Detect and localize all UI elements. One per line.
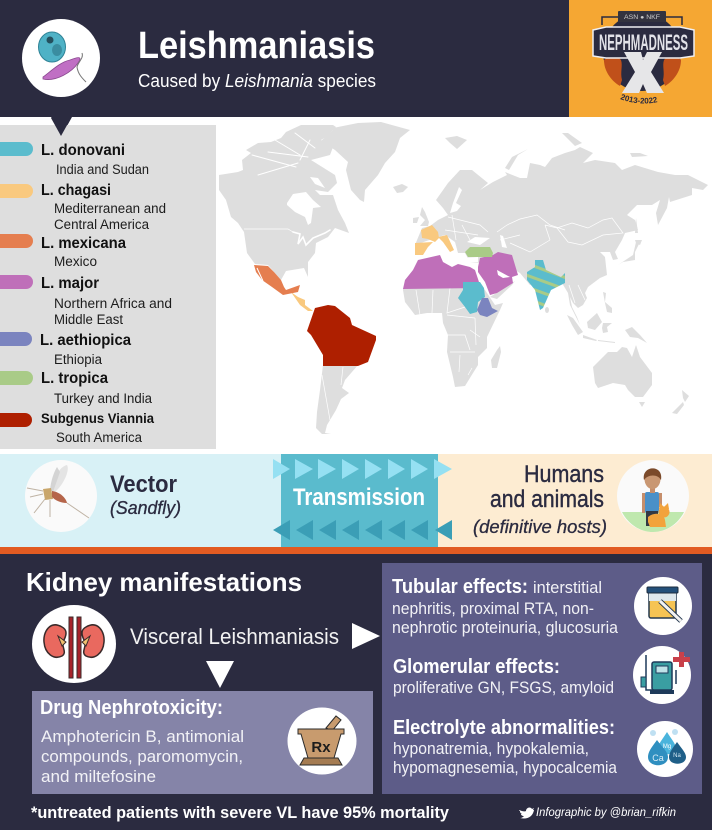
icon: human and cat: [617, 460, 689, 532]
L. chagasi entry: Mediterranean and: [54, 201, 166, 216]
logo panel: NephMadness X: ASN ● NKF: [624, 15, 660, 21]
borders: africa: [416, 288, 480, 375]
panel: drug nephrotoxicity: [32, 691, 373, 794]
region: Ethiopia (L. aethiopica): [477, 298, 498, 317]
great lakes: [293, 230, 330, 245]
iceland: [393, 184, 408, 193]
L. major entry: [0, 275, 172, 327]
band: transmission: [0, 454, 712, 554]
Subgenus Viannia entry: [0, 410, 154, 445]
borders: europe and central asia: [445, 215, 565, 252]
logo years: [620, 99, 668, 104]
L. major entry: Northern Africa and: [54, 296, 172, 311]
arrows: rightward: [273, 459, 452, 479]
text: humans and animals: [473, 461, 607, 537]
icon: mortar and pestle: Rx: [311, 739, 331, 756]
arctic channels: [252, 133, 315, 175]
region: Mexico (L. mexicana): [254, 265, 300, 295]
glomerular effects: [393, 656, 614, 697]
icon: kidneys: [32, 605, 116, 683]
title: Leishmaniasis: [138, 25, 375, 67]
L. donovani entry: L. donovani: [41, 142, 125, 159]
L. mexicana entry: [0, 234, 126, 269]
icon: electrolyte drops: K: [666, 762, 670, 768]
electrolyte abnormalities: [393, 717, 618, 777]
L. chagasi entry: Central America: [54, 217, 149, 232]
panel: drug nephrotoxicity: and miltefosine: [41, 768, 156, 786]
novaya zemlya: [505, 149, 528, 170]
text: vector: [110, 471, 181, 518]
region: Mediterranean (L. chagasi): [291, 225, 454, 311]
panel: drug nephrotoxicity: Drug Nephrotoxicity:: [40, 697, 223, 719]
panel: drug nephrotoxicity: compounds, paromomycin,: [41, 748, 243, 766]
greenland: [321, 122, 410, 202]
borders: americas: [244, 229, 343, 420]
icon: parasite with pointer: [22, 19, 100, 136]
region: India (striped): [527, 260, 565, 310]
icon: mortar and pestle: [288, 708, 356, 774]
L. tropica entry: Turkey and India: [54, 391, 152, 406]
text: humans and animals: (definitive hosts): [473, 517, 607, 537]
borders: east asia: [545, 218, 623, 303]
text: humans and animals: and animals: [490, 486, 604, 513]
L. chagasi entry: L. chagasi: [41, 182, 111, 199]
L. mexicana entry: L. mexicana: [41, 235, 126, 252]
L. aethiopica entry: L. aethiopica: [40, 332, 131, 349]
L. tropica entry: L. tropica: [41, 370, 108, 387]
world map: [219, 122, 708, 434]
region: South America (Subgenus Viannia): [307, 305, 376, 366]
yemen: [490, 281, 515, 299]
region: Turkey (L. tropica): [465, 247, 493, 257]
tubular effects: interstitial: [533, 579, 602, 597]
arrows: leftward: [273, 520, 452, 540]
text: vector: (Sandfly): [110, 498, 181, 518]
arrow: down: [206, 661, 234, 688]
L. aethiopica entry: [0, 332, 131, 367]
L. major entry: L. major: [41, 275, 99, 292]
icon: electrolyte drops: Mg: [663, 744, 671, 750]
label: Transmission: Transmission: [293, 484, 425, 511]
uk and ireland: [413, 207, 429, 226]
eurasia: [415, 147, 708, 325]
label: visceral leishmaniasis: Visceral Leishmaniasis: [130, 624, 339, 649]
panel: kidney manifestations: [0, 554, 712, 830]
credit with twitter icon: Infographic by @brian_rifkin: [536, 805, 676, 819]
text: vector: Vector: [110, 471, 177, 498]
south america south: [316, 365, 358, 434]
footnote: *untreated patients with severe VL have 95% mortality: [31, 803, 450, 822]
electrolyte abnormalities: Electrolyte abnormalities:: [393, 717, 615, 739]
australia and nz: [593, 345, 689, 414]
tubular effects: [392, 576, 619, 637]
tubular effects: nephritis, proximal RTA, non-: [392, 600, 594, 618]
land masses in page coordinates: [219, 122, 708, 434]
L. chagasi entry: [0, 182, 166, 232]
icon: electrolyte drops: [637, 721, 693, 777]
icon: urine cup: [634, 577, 692, 635]
electrolyte abnormalities: hypomagnesemia, hypocalcemia: [393, 759, 618, 777]
region: N. Africa and Middle East (L. major): [403, 252, 518, 295]
icon: electrolyte drops: Ca: [652, 753, 664, 763]
text: humans and animals: Humans: [524, 461, 604, 488]
logo panel: NephMadness X: 2013-2022: [620, 94, 658, 104]
icon: dialysis machine: [633, 646, 691, 704]
icon: sandfly: [25, 460, 97, 532]
L. donovani entry: [0, 142, 149, 177]
arrow: right: [352, 623, 380, 649]
svalbard: [445, 136, 467, 149]
subtitle: Caused by Leishmania species: [138, 71, 376, 91]
north america: [219, 125, 349, 280]
glomerular effects: Glomerular effects:: [393, 656, 560, 678]
panel: drug nephrotoxicity: Amphotericin B, antimonial: [41, 728, 244, 746]
panel: species legend: [0, 118, 216, 449]
electrolyte abnormalities: hyponatremia, hypokalemia,: [393, 740, 589, 758]
heading: Kidney manifestations: [26, 567, 302, 597]
Subgenus Viannia entry: Subgenus Viannia: [41, 410, 154, 426]
white water features: [287, 177, 507, 262]
logo panel: NephMadness X: [569, 0, 712, 117]
L. mexicana entry: Mexico: [54, 254, 97, 269]
japan and sakhalin: [618, 218, 642, 265]
region: Sudan (L. donovani): [458, 282, 485, 314]
africa: [403, 286, 503, 387]
L. major entry: Middle East: [54, 312, 123, 327]
header banner: [0, 0, 712, 117]
arctic russia islands: [562, 133, 648, 157]
L. tropica entry: [0, 370, 152, 406]
sri lanka: [545, 307, 549, 313]
L. aethiopica entry: Ethiopia: [54, 352, 102, 367]
tubular effects: Tubular effects:: [392, 576, 528, 598]
tubular effects: nephrotic proteinuria, glucosuria: [392, 619, 619, 637]
icon: electrolyte drops: Na: [673, 753, 681, 759]
L. donovani entry: India and Sudan: [56, 162, 149, 177]
Subgenus Viannia entry: South America: [56, 430, 142, 445]
glomerular effects: proliferative GN, FSGS, amyloid: [393, 679, 614, 697]
madagascar: [491, 346, 501, 368]
panel: renal effects: [382, 563, 702, 794]
se asia islands: [567, 292, 647, 343]
